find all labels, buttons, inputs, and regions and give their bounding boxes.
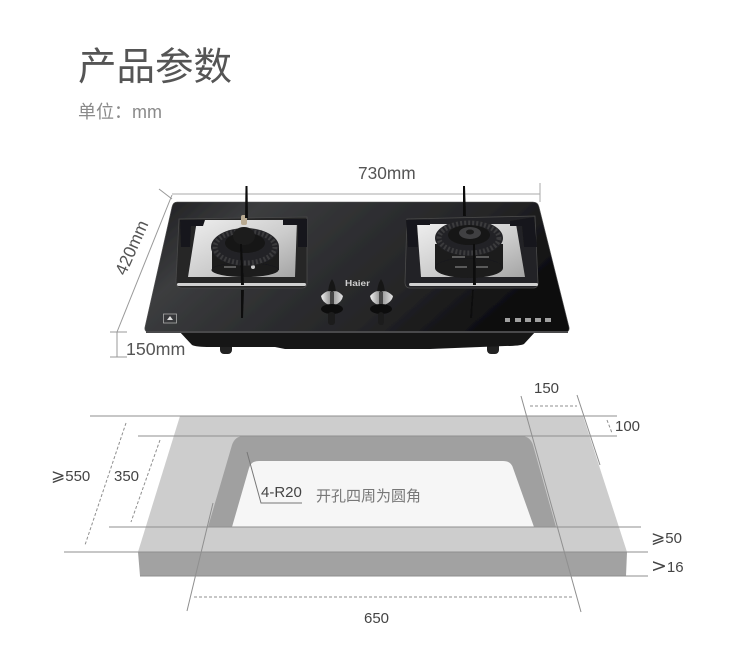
dimension: depth 420mm [111,189,172,332]
pan support [176,217,307,288]
hob glass top [145,202,569,332]
brand logo: Haier [345,278,371,288]
grate bars [463,186,476,318]
ignition needle [241,215,247,225]
burner body [435,244,503,268]
dimension: width 730mm: 730mm [358,163,416,183]
left knob [321,279,343,325]
glass front edge [146,331,568,333]
dimension: height 150mm: 150mm [126,339,185,359]
right knob [370,279,393,325]
grate bars [240,186,248,318]
pan support [405,216,538,288]
corner radius leader [247,452,302,503]
flame slots [224,258,266,269]
dimension: depth 420mm: 420mm [111,217,152,278]
control icons [505,318,551,322]
hob feet [220,342,499,354]
unit note: 单位：mm [78,102,162,122]
countertop front face [138,552,627,576]
dimension labels: 开孔四周为圆角 [316,488,421,505]
dimension labels: 350 [114,468,139,485]
steel plate [188,220,297,277]
dimension: height 150mm [110,332,185,359]
gas hob [145,186,569,354]
dimension labels [51,380,684,627]
dimension labels: 100 [615,418,640,435]
dimension labels: 4-R20 [261,484,302,501]
dimension labels: ⩾50 [651,528,682,548]
title: 产品参数 [78,46,232,89]
chrome trim [177,283,306,286]
left burner [176,186,307,318]
safety badge [164,314,176,323]
burner body [212,248,279,270]
flame slots [452,256,489,268]
cutout diagram [51,380,684,627]
cutout opening [232,461,534,527]
chrome trim [409,283,538,286]
steel plate [417,224,525,277]
dashed measure lines [85,406,612,597]
dimension labels: >16 [651,555,684,577]
grate arms [180,219,307,247]
right burner [405,186,538,318]
dimension labels: 150 [534,380,559,397]
countertop top face [138,416,627,552]
grate arms [406,217,537,247]
cutout inner wall [208,436,556,527]
dimension labels: 650 [364,610,389,627]
hob lower body [178,330,536,349]
reference lines [64,395,648,612]
dimension labels: ⩾550 [51,466,90,486]
